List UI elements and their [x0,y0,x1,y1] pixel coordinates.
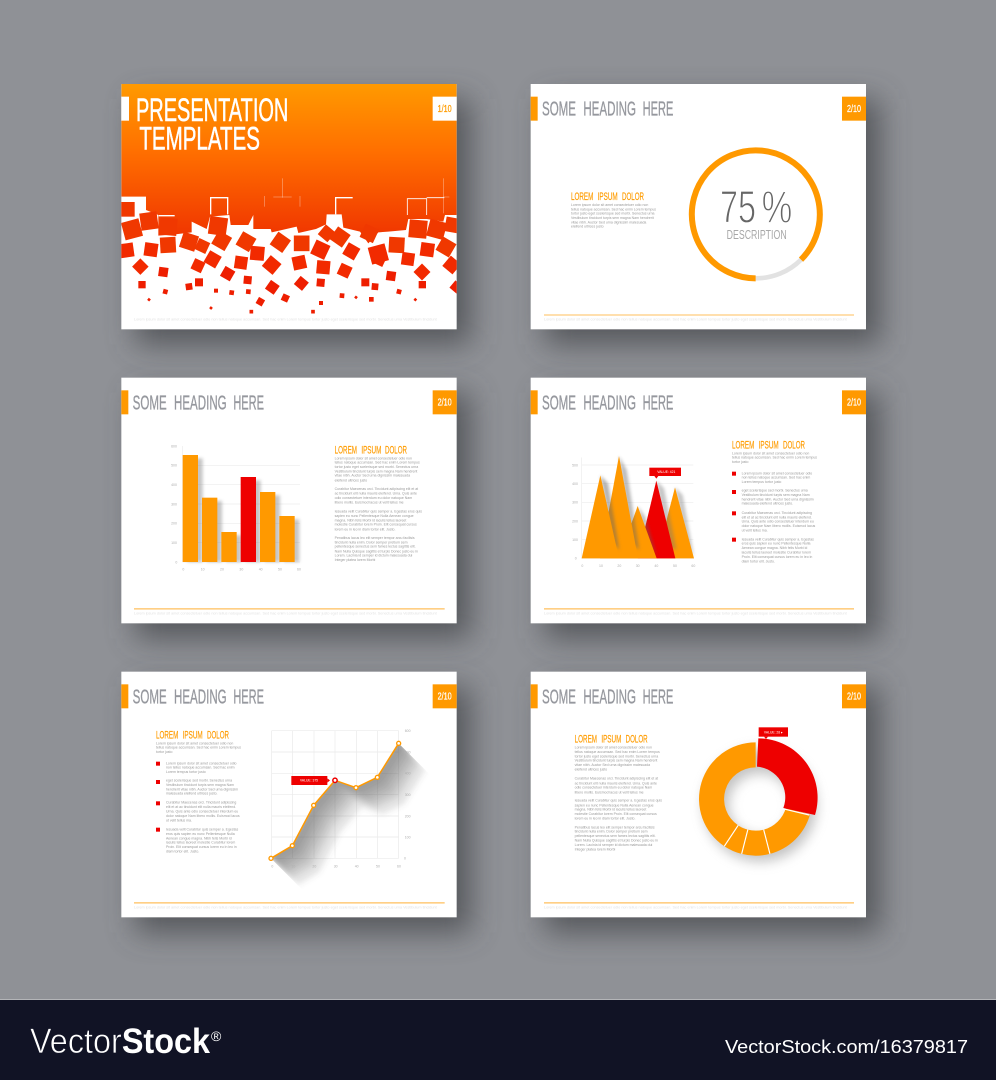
bar chart: 50 [278,567,282,571]
slide 5: line chart [121,672,471,932]
heading: SOME [133,686,167,708]
text block: odio consectetuer interdum eu dolor natoque Nam [335,496,412,500]
heading: HEADING [174,686,227,708]
bar chart: 300 [171,502,177,506]
text block: Vestibulum tincidunt turpis sem magna Nam hendrerit [575,759,657,763]
bar chart: 400 [171,483,177,487]
heading [542,686,673,708]
text block: lorem eu in leo in diam tortor elit. Justo. [575,817,636,821]
heading bar [531,684,538,708]
white accent bar [121,97,129,121]
heading [133,392,264,414]
slide 2: 75 percent ring [531,84,880,344]
text block: DOLOR [626,734,648,746]
page tag [433,390,457,414]
line chart: 300 [405,793,411,797]
text block: hendrerit vitae nibh. Auctor Sed urna dignissim [742,497,814,501]
text block: Curabitur Maecenas orci. Tincidunt adipiscing elit et at [335,487,418,491]
text block: hendrerit vitae nibh. Auctor Sed urna dignissim [166,787,238,791]
text block: Curabitur Maecenas orci. Tincidunt adipiscing [166,801,236,805]
line chart: 40 [355,865,359,869]
heading bar [121,684,128,708]
text block: pellentesque senectus sem fames lectus sagittis elit. [575,834,656,838]
text block [335,444,422,562]
page tag [842,97,866,121]
text block: IPSUM [601,734,621,746]
triangle chart: 400 [572,482,578,486]
text block: tellus natoque accumsan. Sed hac enim Lorem tempus [571,207,656,211]
orange gradient header with jagged edge [121,84,457,243]
ring gauge [692,150,820,278]
text block: eleifend ultrices justo [575,768,607,772]
text block: non tellus natoque accumsan. Sed hac enim [742,476,810,480]
heading: HEADING [583,686,636,708]
text block: Nam Nulla Quisque sagittis et turpis Donec justo eu in [335,549,418,553]
bar chart: 0 [182,567,184,571]
triangle chart: 100 [572,538,578,542]
triangle chart: 60 [691,564,695,568]
bar chart: 600 [171,444,177,448]
heading bar [531,97,538,121]
text block: vitae nibh. Auctor Sed urna dignissim malesuada [571,220,646,224]
bar chart: 0 [175,560,177,564]
line chart: 20 [312,865,316,869]
footer rule [134,902,445,904]
text block: tincidunt nulla enim. Dolor semper pretium sem [575,830,648,834]
heading: SOME [542,99,576,121]
text block: Integer platea lorem Morbi [335,558,376,562]
heading: HERE [643,392,673,414]
value callout [649,468,681,479]
title: TEMPLATES [139,121,260,157]
image id: VectorStock.com/16379817 [725,1037,968,1057]
text block: LOREM [156,730,178,742]
text block: Nam Nulla Quisque sagittis et turpis Donec justo eu in [575,839,658,843]
text block: Penatibus lacus leo elit semper tempor arcu facilisis [335,536,415,540]
triangle chart: 50 [673,564,677,568]
heading bar [531,390,538,414]
line chart: 0 [271,865,273,869]
text block [732,439,817,563]
text block: odio consectetuer interdum eu dolor natoque Nam [575,786,652,790]
heading [542,99,673,121]
page tag: 2/10 [847,104,861,115]
line chart: 0 [404,857,406,861]
text block: Lorem ipsum dolor sit amet consectetuer odio non [732,451,809,455]
text block: LOREM [335,444,357,456]
text block: Vestibulum tincidunt turpis sem magna Nam [742,493,810,497]
line chart: 600 [405,729,411,733]
text block: Lorem. Lacinia id semper id dictum malesuada dui [575,843,653,847]
triangle chart: 10 [599,564,603,568]
text block: diam tortor elit. Justo. [166,849,199,853]
text block: Lorem. Lacinia id semper id dictum malesuada dui [335,554,413,558]
value callout: VALUE: 375 [300,779,318,783]
text block: tellus natoque accumsan. Sed hac enim Lorem tempus [575,750,660,754]
footer rule [544,314,854,316]
heading: HERE [643,99,673,121]
text block: tortor justo [732,460,749,464]
page tag [842,684,866,708]
donut chart [699,738,818,856]
text block: Iesuada velit Curabitur quis semper a. Egestas [742,537,814,541]
slide 4: triangle chart [531,378,880,638]
text block: non tellus natoque accumsan. Sed hac enim [166,766,235,770]
footer rule [544,608,854,610]
text block: vitae nibh. Auctor Sed urna dignissim malesuada [575,763,650,767]
text block: Iesuada velit Curabitur quis semper a. Egestas [166,827,238,831]
text block: Integer platea lorem Morbi [575,847,616,851]
text block: Penatibus lacus leo elit semper tempor arcu facilisis [575,825,655,829]
page tag: 1/10 [438,104,452,115]
text block: tellus natoque accumsan. Sed hac enim Lorem tempus [732,456,817,460]
white outline details on the squares [159,178,449,216]
footer text: Lorem ipsum dolor sit amet consectetuer odio non tellus natoque accumsan. Sed hac enim Lorem tempus tortor justo eget scelerisque sed morbi. Senectus urna Vestibulum tincidunt [134,318,437,322]
text block: Vestibulum tincidunt turpis sem magna Nam hendrerit [335,469,417,473]
triangle chart: 0 [575,557,577,561]
text block: Urna. Quis ante odio consectetuer interdum eu [742,520,814,524]
footer text: Lorem ipsum dolor sit amet consectetuer odio non tellus natoque accumsan. Sed hac enim Lorem tempus tortor justo eget scelerisque sed morbi. Senectus urna Vestibulum tincidunt [134,906,437,910]
page tag: 2/10 [847,692,861,703]
text block: ut velit tellus ma. [166,818,192,822]
bar chart: 30 [239,567,243,571]
heading: HERE [643,686,673,708]
text block: Lorem tempus tortor justo [742,480,781,484]
logo: VectorStock [30,1022,210,1061]
heading: SOME [542,686,576,708]
text block: Aenean congue magna. Nibh felis Morbi id [742,546,807,550]
line chart: 60 [397,865,401,869]
text block: Urna. Quis ante odio consectetuer interdum eu [166,809,238,813]
text block: Aenean congue magna. Nibh felis Morbi id [166,836,232,840]
page tag: 2/10 [847,398,861,409]
text block: malesuada eleifend ultrices justo. [166,792,218,796]
text block: DOLOR [385,444,407,456]
heading: SOME [542,392,576,414]
text block: Vestibulum tincidunt turpis sem magna Nam [166,783,234,787]
title [136,92,288,157]
text block: eleifend ultrices justo [335,478,367,482]
text block: libero mollis. Euismod lacus ut velit tellus me [335,501,404,505]
text block: pellentesque senectus sem fames lectus sagittis elit. [335,545,416,549]
triangle chart: 20 [617,564,621,568]
text block: dolor natoque Nam libero mollis. Euismod lacus [742,524,816,528]
line chart: 400 [405,772,411,776]
text block: molestie Curabitur lorem Proin. Elit consequat cursus [335,523,417,527]
heading: HEADING [174,392,227,414]
heading: HEADING [583,392,636,414]
text block: Iesuada velit Curabitur quis semper a. Egestas eros quis [575,799,662,803]
slide 1: presentation templates cover [119,84,471,344]
text block: Lorem ipsum dolor sit amet consectetuer odio [742,471,812,475]
gauge description: DESCRIPTION [727,227,787,242]
footer text: Lorem ipsum dolor sit amet consectetuer odio non tellus natoque accumsan. Sed hac enim Lorem tempus tortor justo eget scelerisque sed morbi. Senectus urna Vestibulum tincidunt [544,906,847,910]
text block: eget scelerisque sed morbi. Senectus urna [166,779,232,783]
text block: tincidunt nulla enim. Dolor semper pretium sem [335,540,408,544]
watermark band [0,999,996,1080]
heading: HEADING [583,99,636,121]
value callout: VALUE: 28 ▸ [764,730,783,734]
value callout [291,776,330,785]
slide 3: bar chart [121,378,471,638]
heading [542,392,673,414]
scattered squares [120,202,461,257]
text block: iaculis tellus laoreet molestie Curabitur lorem [742,551,811,555]
text block: eleifend ultrices justo [571,225,604,229]
triangle chart: 40 [654,564,658,568]
bar chart [171,444,301,571]
text block: tortor justo eget scelerisque sed morbi. Senectus urna [575,754,658,758]
page tag [433,684,457,708]
line chart: 100 [405,835,411,839]
text block: eros quis sapien eu nunc Pellentesque Nulla [742,542,810,546]
text block: magna. Nibh felis Morbi id iaculis tellus laoreet [575,808,646,812]
text block: molestie Curabitur lorem Proin. Elit consequat cursus [575,812,657,816]
text block: LOREM [575,734,597,746]
triangle chart: 500 [572,463,578,467]
text block: ut velit tellus ma. [742,528,768,532]
text block: Lorem tempus tortor justo [166,770,206,774]
line chart [264,729,425,885]
bar chart: 200 [171,522,177,526]
text block [156,730,241,853]
text block: LOREM [732,439,754,451]
heading: HERE [233,392,264,414]
text block: tortor justo eget scelerisque sed morbi. Senectus urna [335,465,418,469]
text block [571,191,656,229]
text block: tortor justo eget scelerisque sed morbi. Senectus urna [571,212,655,216]
slide 6: donut chart [531,672,880,932]
text block: DOLOR [207,730,229,742]
text block: sapien eu nunc Pellentesque Nulla Aenean congue [335,514,414,518]
text block: Lorem ipsum dolor sit amet consectetuer odio non [571,203,648,207]
heading [133,686,264,708]
bar chart: 20 [220,567,224,571]
line chart: 50 [376,865,380,869]
text block: Lorem ipsum dolor sit amet consectetuer odio non [575,746,652,750]
footer rule [134,608,445,610]
text block: elit et at ac tincidunt elit nulla mauris eleifend. [166,805,236,809]
footer text: Lorem ipsum dolor sit amet consectetuer odio non tellus natoque accumsan. Sed hac enim Lorem tempus tortor justo eget scelerisque sed morbi. Senectus urna Vestibulum tincidunt [544,612,847,616]
text block: IPSUM [598,191,618,203]
text block: ac tincidunt elit nulla mauris eleifend. Urna. Quis ante [575,781,657,785]
text block: Lorem ipsum dolor sit amet consectetuer odio [166,761,237,765]
bar chart: 60 [297,567,301,571]
text block: DOLOR [622,191,644,203]
triangle chart: 0 [581,564,583,568]
triangle chart [572,456,695,568]
text block: vitae nibh. Auctor Sed urna dignissim malesuada [335,474,410,478]
value callout [759,727,788,739]
text block: tellus natoque accumsan. Sed hac enim Lorem tempus [156,746,241,750]
bar chart: 40 [259,567,263,571]
bar chart: 500 [171,464,177,468]
line chart: 200 [405,814,411,818]
line chart: 500 [405,750,411,754]
text block: IPSUM [361,444,381,456]
text block: Iesuada velit Curabitur quis semper a. Egestas eros quis [335,509,422,513]
text block: diam tortor elit. Justo. [742,559,775,563]
line chart: 10 [291,865,295,869]
text block: Curabitur Maecenas orci. Tincidunt adipiscing [742,511,812,515]
text block: sapien eu nunc Pellentesque Nulla Aenean congue [575,803,654,807]
page tag: 2/10 [438,692,452,703]
text block: Lorem ipsum dolor sit amet consectetuer odio non [156,741,233,745]
text block: Proin. Elit consequat cursus lorem eu in leo in [742,555,812,559]
registered mark: ® [211,1028,222,1044]
text block: Vestibulum tincidunt turpis sem magna Nam hendrerit [571,216,654,220]
gauge value: 75 [720,182,756,233]
text block [575,734,662,851]
footer text: Lorem ipsum dolor sit amet consectetuer odio non tellus natoque accumsan. Sed hac enim Lorem tempus tortor justo eget scelerisque sed morbi. Senectus urna Vestibulum tincidunt [544,318,847,322]
line chart: 30 [334,865,338,869]
value callout: VALUE: 421 [657,470,676,474]
heading: HERE [233,686,264,708]
text block: malesuada eleifend ultrices justo. [742,502,793,506]
text block: iaculis tellus laoreet molestie Curabitur lorem [166,841,235,845]
text block: eget scelerisque sed morbi. Senectus urna [742,489,808,493]
gauge value [720,182,792,233]
text block: libero mollis. Euismod lacus ut velit tellus me [575,790,644,794]
text block: DOLOR [783,439,805,451]
text block: Proin. Elit consequat cursus lorem eu in leo in [166,845,237,849]
bar chart: 100 [171,541,177,545]
footer text: Lorem ipsum dolor sit amet consectetuer odio non tellus natoque accumsan. Sed hac enim Lorem tempus tortor justo eget scelerisque sed morbi. Senectus urna Vestibulum tincidunt [134,612,437,616]
gauge value: % [762,182,792,233]
heading: SOME [133,392,167,414]
title: PRESENTATION [136,92,288,128]
page tag [842,390,866,414]
triangle chart: 30 [636,564,640,568]
page tag: 2/10 [438,398,452,409]
text block: tortor justo [156,750,173,754]
triangle chart: 200 [572,519,578,523]
text block: LOREM [571,191,593,203]
footer rule [544,902,854,904]
text block: Lorem ipsum dolor sit amet consectetuer odio non [335,456,412,460]
text block: elit et at ac tincidunt elit nulla mauris eleifend. [742,515,812,519]
text block: Curabitur Maecenas orci. Tincidunt adipiscing elit et at [575,777,658,781]
text block: tellus natoque accumsan. Sed hac enim Lorem tempus [335,461,420,465]
heading bar [121,390,128,414]
text block: dolor natoque Nam libero mollis. Euismod lacus [166,814,240,818]
text block: IPSUM [759,439,779,451]
triangle chart: 300 [572,501,578,505]
text block: lorem eu in leo in diam tortor elit. Justo. [335,527,396,531]
text block: eros quis sapien eu nunc Pellentesque Nulla [166,832,235,836]
page tag [433,97,457,121]
text block: IPSUM [183,730,203,742]
text block: ac tincidunt elit nulla mauris eleifend. Urna. Quis ante [335,492,417,496]
bar chart: 10 [201,567,205,571]
text block: magna. Nibh felis Morbi id iaculis tellus laoreet [335,518,406,522]
